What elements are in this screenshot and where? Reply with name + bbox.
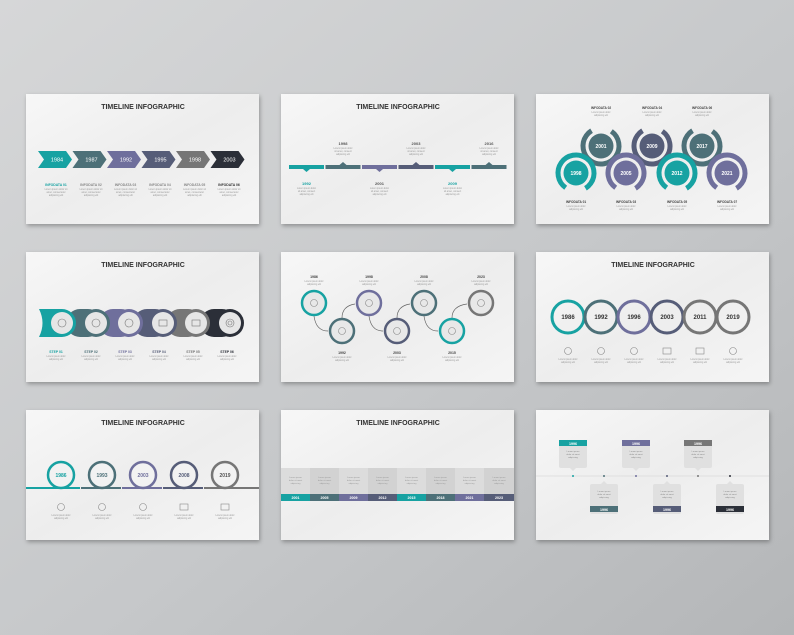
slide 6: chained rings: 2011	[693, 315, 707, 321]
slide 4: step bands with icons	[26, 252, 259, 382]
slide 7: rings on line: adipiscing elit	[218, 517, 232, 520]
year labels: 2015	[448, 351, 456, 355]
inner circles with years: 2001	[595, 144, 607, 150]
slide 8: column blocks: 2001	[292, 496, 300, 500]
slide 8: column blocks: 2009	[350, 496, 358, 500]
slide 3: interlocking circles: adipiscing elit	[569, 208, 583, 211]
slide 9: callout boxes on line: adipiscing	[631, 457, 642, 459]
slide 6: chained rings: 2003	[660, 315, 674, 321]
labels: INFODATA 02	[591, 106, 611, 110]
labels: INFODATA 02	[80, 183, 102, 187]
slide 7: rings on line: Lorem ipsum dolor	[174, 514, 194, 517]
slide 4: step bands with icons: Lorem ipsum dolor	[115, 355, 135, 358]
step labels: STEP 06	[220, 350, 234, 354]
slide 6: chained rings: Lorem ipsum dolor	[624, 358, 644, 361]
labels: INFODATA 01	[45, 183, 67, 187]
slide 8: column blocks: Lorem ipsum	[405, 476, 418, 479]
slide 9: callout boxes on line: 1996	[632, 442, 640, 446]
slide 9: callout boxes on line: 1996	[569, 442, 577, 446]
slide 9: callout boxes on line	[536, 410, 769, 540]
slide 1: chevron timeline: Lorem ipsum dolor sit	[45, 188, 68, 191]
slide 6: chained rings: adipiscing elit	[726, 361, 740, 364]
slide 9: callout boxes on line: 1996	[726, 508, 734, 512]
circles	[302, 291, 493, 343]
slide 8: column blocks: Lorem ipsum	[318, 476, 331, 479]
slide 2: segmented bar timeline: Lorem ipsum dolor	[443, 187, 462, 190]
line segments	[26, 487, 259, 489]
labels	[45, 183, 240, 187]
slide 7: rings on line: Lorem ipsum dolor	[51, 514, 71, 517]
slide 3: interlocking circles	[536, 94, 769, 224]
slide 6: chained rings: Lorem ipsum dolor	[690, 358, 710, 361]
year labels: 2008	[420, 275, 428, 279]
slide 1: chevron timeline: adipiscing elit	[118, 194, 133, 197]
year labels: 1998	[339, 141, 348, 146]
slide 4: step bands with icons: adipiscing elit	[186, 358, 200, 361]
slide 2: segmented bar timeline: sit amet, consect	[480, 150, 498, 153]
bands	[39, 309, 236, 337]
slide 3: interlocking circles: Lorem ipsum dolor	[566, 205, 586, 208]
year labels: 1986	[310, 275, 318, 279]
slide 3: interlocking circles: Lorem ipsum dolor	[642, 111, 662, 114]
chevrons: 1998	[189, 158, 201, 164]
slide 3: interlocking circles: adipiscing elit	[619, 208, 633, 211]
slide 3: interlocking circles: adipiscing elit	[720, 208, 734, 211]
labels: INFODATA 04	[149, 183, 171, 187]
slide 6: chained rings: adipiscing elit	[594, 361, 608, 364]
step circles	[48, 309, 244, 337]
labels: INFODATA 01	[566, 200, 586, 204]
title: TIMELINE INFOGRAPHIC	[101, 420, 185, 427]
year labels: 2023	[477, 275, 485, 279]
slide 9: callout boxes on line: adipiscing	[599, 497, 610, 499]
labels: INFODATA 05	[184, 183, 205, 187]
slide 6: chained rings: Lorem ipsum dolor	[558, 358, 578, 361]
slide 2: segmented bar timeline: adipiscing elit	[409, 153, 423, 156]
slide 9: callout boxes on line: Lorem ipsum	[567, 450, 579, 453]
slide 9: callout boxes on line: Lorem ipsum	[724, 490, 736, 493]
rings	[48, 462, 238, 488]
labels: INFODATA 06	[218, 183, 240, 187]
inner circles with years	[564, 134, 740, 186]
slide 2: segmented bar timeline: adipiscing elit	[373, 193, 387, 196]
slide 5: zigzag circles with arrows: adipiscing elit	[445, 359, 459, 362]
slide 1: chevron timeline: adipiscing elit	[84, 194, 99, 197]
year labels: 1992	[302, 181, 312, 186]
chevrons	[38, 151, 244, 168]
slide 2: segmented bar timeline: sit amet, consect	[407, 150, 425, 153]
slide 5: zigzag circles with arrows: adipiscing elit	[307, 283, 321, 286]
slide 2: segmented bar timeline: sit amet, consect	[334, 150, 352, 153]
slide 7: rings on line: adipiscing elit	[54, 517, 68, 520]
slide 9: callout boxes on line: Lorem ipsum	[630, 450, 642, 453]
labels: INFODATA 04	[642, 106, 662, 110]
slide 7: rings on line: adipiscing elit	[177, 517, 191, 520]
slide 9: callout boxes on line: adipiscing	[568, 457, 579, 459]
labels: INFODATA 03	[616, 200, 636, 204]
slide 2: segmented bar timeline: adipiscing elit	[482, 153, 496, 156]
slide 8: column blocks: adipiscing	[465, 483, 475, 485]
slide 4: step bands with icons: Lorem ipsum dolor	[149, 355, 169, 358]
slide 8: column blocks: adipiscing	[291, 483, 301, 485]
slide 5: zigzag circles with arrows: Lorem ipsum dolor	[442, 356, 462, 359]
slide 8: column blocks: dolor sit amet	[405, 479, 418, 482]
slide 2: segmented bar timeline	[281, 94, 514, 224]
slide 4: step bands with icons: adipiscing elit	[118, 358, 132, 361]
title: TIMELINE INFOGRAPHIC	[101, 262, 185, 269]
slide 5: zigzag circles with arrows: adipiscing elit	[362, 283, 376, 286]
slide 6: chained rings: 2019	[726, 315, 740, 321]
blocks	[281, 468, 514, 501]
slide 2: segmented bar timeline: sit amet, consect	[298, 190, 315, 193]
slide 9: callout boxes on line: 1996	[600, 508, 608, 512]
slide 6: chained rings: adipiscing elit	[627, 361, 641, 364]
rings	[552, 301, 749, 333]
slide 3: interlocking circles: Lorem ipsum dolor	[692, 111, 712, 114]
slide 6: chained rings: 1986	[561, 315, 575, 321]
year labels: 2016	[485, 141, 494, 146]
slide 1: chevron timeline: amet, consectetur	[185, 191, 204, 194]
title: TIMELINE INFOGRAPHIC	[611, 262, 695, 269]
slide 7: rings on line: 2019	[219, 473, 231, 479]
slide 8: column blocks: adipiscing	[378, 483, 388, 485]
slide 7: rings on line: Lorem ipsum dolor	[92, 514, 112, 517]
slide 8: column blocks: Lorem ipsum	[493, 476, 505, 479]
slide 2: segmented bar timeline: sit amet, consect	[444, 190, 461, 193]
chevrons: 1987	[85, 158, 98, 164]
slide 3: interlocking circles: Lorem ipsum dolor	[591, 111, 611, 114]
slide 8: column blocks	[281, 410, 514, 540]
slide 9: callout boxes on line: 1996	[694, 442, 702, 446]
slide 5: zigzag circles with arrows: Lorem ipsum dolor	[387, 356, 407, 359]
slide 9: callout boxes on line: dolor sit amet	[691, 453, 705, 456]
slide 5: zigzag circles with arrows: adipiscing elit	[417, 283, 431, 286]
slide 1: chevron timeline: Lorem ipsum dolor sit	[114, 188, 137, 191]
slide 9: callout boxes on line: adipiscing	[662, 497, 673, 499]
slide 8: column blocks: Lorem ipsum	[463, 476, 476, 479]
slide 9: callout boxes on line: Lorem ipsum	[598, 490, 610, 493]
slide 9: callout boxes on line: Lorem ipsum	[692, 450, 704, 453]
slide 1: chevron timeline: Lorem ipsum dolor sit	[149, 188, 172, 191]
slide 7: rings on line: Lorem ipsum dolor	[133, 514, 153, 517]
slide 2: segmented bar timeline: Lorem ipsum dolor	[479, 147, 499, 150]
slide 8: column blocks: Lorem ipsum	[289, 476, 302, 479]
labels: INFODATA 05	[667, 200, 687, 204]
year labels: 2003	[393, 351, 401, 355]
slide 8: column blocks: dolor sit amet	[376, 479, 389, 482]
inner circles with years: 2017	[696, 144, 708, 150]
slide 5: zigzag circles with arrows: Lorem ipsum dolor	[304, 280, 324, 283]
slide 8: column blocks: 2021	[466, 496, 474, 500]
slide 2: segmented bar timeline: sit amet, consect	[371, 190, 388, 193]
slide 7: rings on line: 2008	[178, 473, 190, 479]
slide 5: zigzag circles with arrows: Lorem ipsum dolor	[359, 280, 379, 283]
year labels: 1992	[338, 351, 346, 355]
step labels	[49, 350, 234, 354]
slide 7: rings on line	[26, 410, 259, 540]
slide 8: column blocks: Lorem ipsum	[347, 476, 360, 479]
slide 9: callout boxes on line: Lorem ipsum	[661, 490, 673, 493]
year labels: 1998	[365, 275, 373, 279]
slide 5: zigzag circles with arrows: Lorem ipsum dolor	[471, 280, 491, 283]
slide 4: step bands with icons: Lorem ipsum dolor	[46, 355, 66, 358]
chevrons: 2003	[223, 158, 236, 164]
slide 6: chained rings: 1996	[627, 315, 641, 321]
slide 4: step bands with icons: adipiscing elit	[84, 358, 98, 361]
chevrons: 1995	[154, 158, 167, 164]
slide 7: rings on line: 2003	[137, 473, 149, 479]
slide 6: chained rings: 1992	[594, 315, 608, 321]
slide 8: column blocks: dolor sit amet	[492, 479, 506, 482]
slide 9: callout boxes on line: adipiscing	[725, 497, 736, 499]
inner circles with years: 2005	[620, 171, 632, 177]
title: TIMELINE INFOGRAPHIC	[356, 420, 440, 427]
labels	[566, 106, 737, 204]
slide 8: column blocks: 2005	[320, 496, 328, 500]
slide 3: interlocking circles: adipiscing elit	[695, 114, 709, 117]
slide 9: callout boxes on line: dolor sit amet	[629, 453, 643, 456]
slide 3: interlocking circles: adipiscing elit	[645, 114, 659, 117]
slide 1: chevron timeline: Lorem ipsum dolor sit	[218, 188, 241, 191]
slide 7: rings on line: adipiscing elit	[95, 517, 109, 520]
slide 6: chained rings: Lorem ipsum dolor	[657, 358, 677, 361]
slide 1: chevron timeline: Lorem ipsum dolor sit	[80, 188, 103, 191]
callout boxes	[559, 440, 744, 514]
slide 8: column blocks: 2023	[495, 496, 503, 500]
slide 9: callout boxes on line: dolor sit amet	[723, 493, 737, 496]
year labels: 2001	[375, 181, 385, 186]
year labels: 2009	[448, 181, 458, 186]
slide 2: segmented bar timeline: Lorem ipsum dolor	[297, 187, 316, 190]
slide 3: interlocking circles: Lorem ipsum dolor	[717, 205, 737, 208]
slide 8: column blocks: dolor sit amet	[347, 479, 360, 482]
slide 9: callout boxes on line: 1996	[663, 508, 671, 512]
slide 8: column blocks: dolor sit amet	[289, 479, 302, 482]
slide 1: chevron timeline: amet, consectetur	[81, 191, 101, 194]
slide 2: segmented bar timeline: adipiscing elit	[336, 153, 350, 156]
slide 1: chevron timeline	[26, 94, 259, 224]
inner circles with years: 2009	[646, 144, 658, 150]
slide 5: zigzag circles with arrows	[281, 252, 514, 382]
inner circles with years: 2012	[671, 171, 683, 177]
slide 3: interlocking circles: Lorem ipsum dolor	[667, 205, 687, 208]
slide 7: rings on line: Lorem ipsum dolor	[215, 514, 235, 517]
labels: INFODATA 03	[115, 183, 136, 187]
step labels: STEP 04	[152, 350, 166, 354]
timeline line and dots	[536, 475, 769, 477]
slide 3: interlocking circles: adipiscing elit	[594, 114, 608, 117]
slide 2: segmented bar timeline: Lorem ipsum dolor	[406, 147, 426, 150]
slide 6: chained rings: Lorem ipsum dolor	[723, 358, 743, 361]
slide 1: chevron timeline: adipiscing elit	[153, 194, 168, 197]
step labels: STEP 02	[84, 350, 98, 354]
slide 4: step bands with icons: adipiscing elit	[220, 358, 234, 361]
slide 7: rings on line: 1986	[55, 473, 67, 479]
slide 4: step bands with icons: Lorem ipsum dolor	[183, 355, 203, 358]
slide 1: chevron timeline: adipiscing elit	[49, 194, 64, 197]
step labels: STEP 01	[49, 350, 63, 354]
slide 9: callout boxes on line: adipiscing	[693, 457, 704, 459]
slide 2: segmented bar timeline: adipiscing elit	[446, 193, 460, 196]
slide 8: column blocks: adipiscing	[407, 483, 417, 485]
slide 6: chained rings: adipiscing elit	[660, 361, 674, 364]
slide 9: callout boxes on line: dolor sit amet	[566, 453, 580, 456]
slide 1: chevron timeline: amet, consectetur	[116, 191, 135, 194]
slide 8: column blocks: adipiscing	[349, 483, 359, 485]
slide 5: zigzag circles with arrows: Lorem ipsum dolor	[332, 356, 352, 359]
slide 2: segmented bar timeline: Lorem ipsum dolor	[370, 187, 389, 190]
slide 9: callout boxes on line: dolor sit amet	[597, 493, 611, 496]
slide 4: step bands with icons: adipiscing elit	[152, 358, 166, 361]
inner circles with years: 2021	[721, 171, 733, 177]
slide 8: column blocks: 2018	[436, 496, 444, 500]
slide 8: column blocks: adipiscing	[436, 483, 446, 485]
slide 1: chevron timeline: amet, consectetur	[46, 191, 66, 194]
icons	[58, 504, 229, 510]
slide 3: interlocking circles: Lorem ipsum dolor	[616, 205, 636, 208]
labels: INFODATA 07	[717, 200, 737, 204]
slide 1: chevron timeline: Lorem ipsum dolor sit	[183, 188, 206, 191]
inner circles with years: 1998	[570, 171, 582, 177]
chevrons: 1992	[120, 158, 132, 164]
step labels: STEP 03	[118, 350, 132, 354]
slide 8: column blocks: 2012	[378, 496, 386, 500]
slide 3: interlocking circles: adipiscing elit	[670, 208, 684, 211]
title: TIMELINE INFOGRAPHIC	[356, 104, 440, 111]
rings	[551, 121, 752, 198]
icons	[564, 348, 736, 354]
slide 1: chevron timeline: adipiscing elit	[187, 194, 202, 197]
slide 6: chained rings: Lorem ipsum dolor	[591, 358, 611, 361]
slide 6: chained rings: adipiscing elit	[561, 361, 575, 364]
slide 1: chevron timeline: amet, consectetur	[150, 191, 170, 194]
slide 6: chained rings	[536, 252, 769, 382]
slide 7: rings on line: adipiscing elit	[136, 517, 150, 520]
slide 4: step bands with icons: Lorem ipsum dolor	[81, 355, 101, 358]
slide 7: rings on line: 1993	[96, 473, 108, 479]
slide 4: step bands with icons: adipiscing elit	[49, 358, 63, 361]
arrows	[314, 304, 467, 331]
slide 2: segmented bar timeline: adipiscing elit	[300, 193, 314, 196]
year labels: 2003	[412, 141, 421, 146]
slide 8: column blocks: dolor sit amet	[434, 479, 447, 482]
slide 9: callout boxes on line: dolor sit amet	[660, 493, 674, 496]
bars	[289, 162, 506, 172]
slide 4: step bands with icons: Lorem ipsum dolor	[217, 355, 237, 358]
slide 5: zigzag circles with arrows: adipiscing elit	[335, 359, 349, 362]
labels: INFODATA 06	[692, 106, 712, 110]
slide 8: column blocks: dolor sit amet	[318, 479, 331, 482]
step labels: STEP 05	[186, 350, 200, 354]
slide 8: column blocks: adipiscing	[320, 483, 330, 485]
slide 8: column blocks: 2015	[408, 496, 416, 500]
slide 5: zigzag circles with arrows: adipiscing elit	[474, 283, 488, 286]
slide 2: segmented bar timeline: Lorem ipsum dolor	[333, 147, 353, 150]
slide 5: zigzag circles with arrows: Lorem ipsum dolor	[414, 280, 434, 283]
slide 8: column blocks: dolor sit amet	[463, 479, 476, 482]
year labels	[302, 141, 494, 186]
year labels	[310, 275, 485, 355]
slide 6: chained rings: adipiscing elit	[693, 361, 707, 364]
slide 5: zigzag circles with arrows: adipiscing elit	[390, 359, 404, 362]
title: TIMELINE INFOGRAPHIC	[101, 104, 185, 111]
slide 8: column blocks: Lorem ipsum	[434, 476, 447, 479]
chevrons: 1984	[51, 158, 63, 164]
slide 8: column blocks: adipiscing	[494, 483, 505, 485]
slide 8: column blocks: Lorem ipsum	[376, 476, 389, 479]
slide 1: chevron timeline: amet, consectetur	[219, 191, 239, 194]
slide 1: chevron timeline: adipiscing elit	[222, 194, 237, 197]
